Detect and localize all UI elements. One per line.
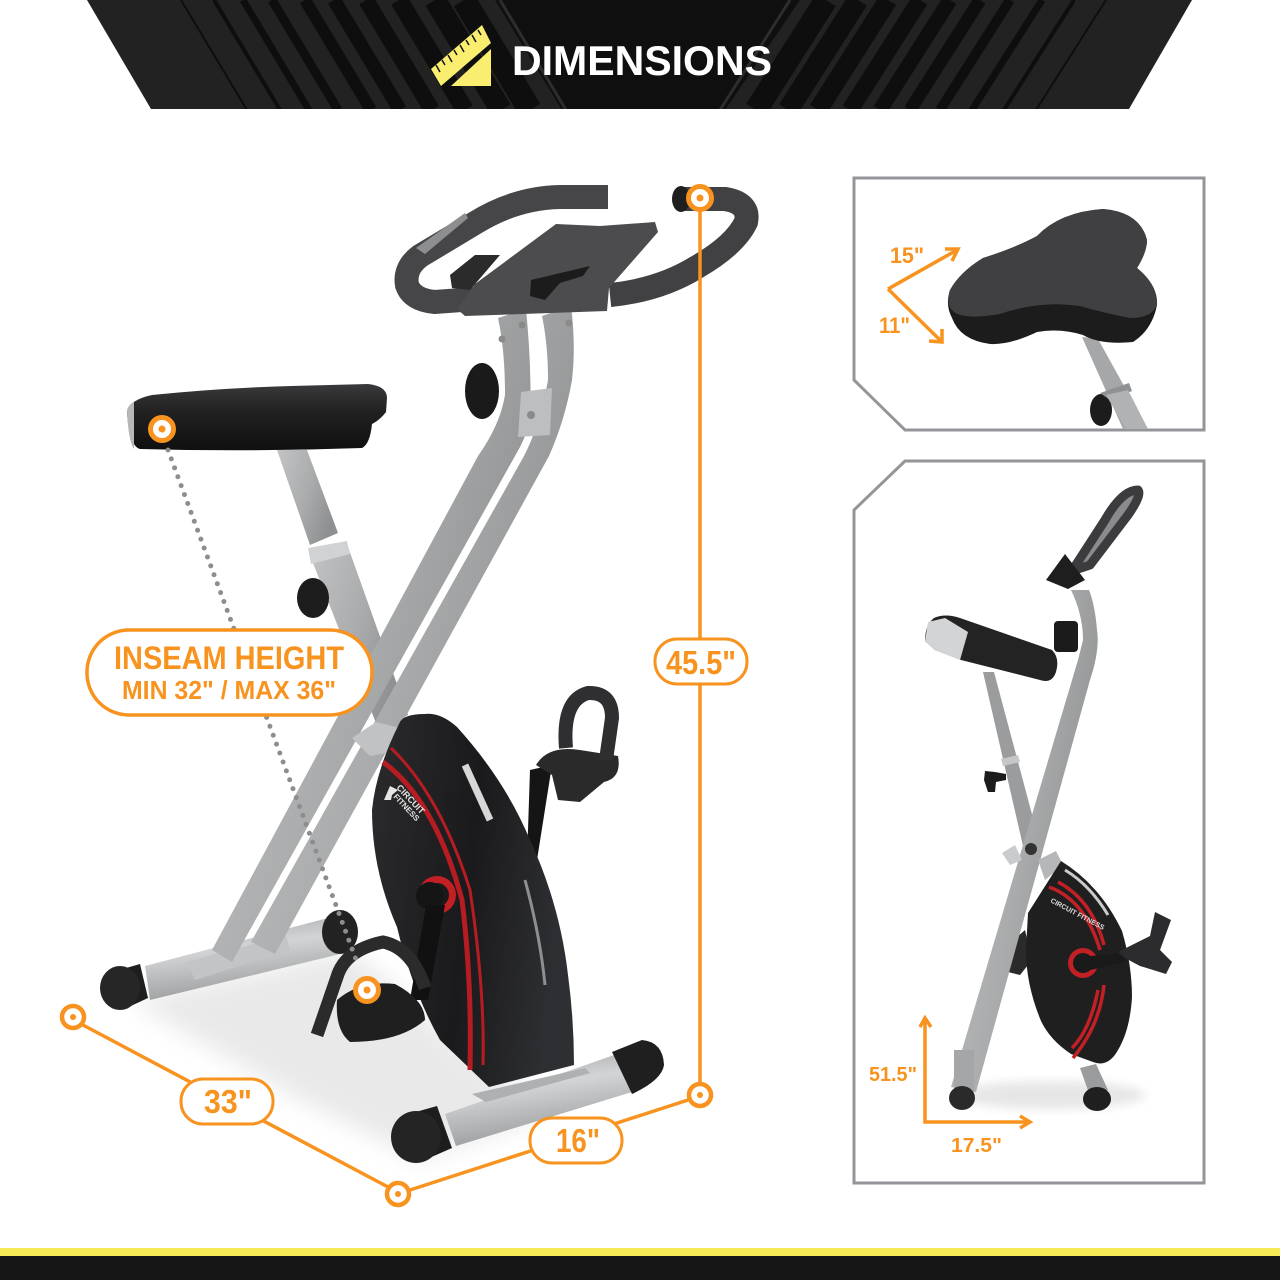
header banner bbox=[87, 0, 1192, 110]
height dimension line bbox=[698, 210, 702, 1082]
arrows bbox=[920, 1018, 1030, 1128]
marker: handlebar top bbox=[688, 186, 712, 210]
rear foot tube bbox=[145, 918, 340, 1000]
seat knob bbox=[297, 578, 329, 618]
marker: front corner bbox=[387, 1183, 409, 1205]
handlebar left bbox=[407, 197, 608, 302]
seat top surface bbox=[948, 209, 1157, 318]
red stripes bbox=[383, 748, 483, 1070]
handlebar mount bbox=[1046, 554, 1085, 589]
side highlights bbox=[1065, 870, 1108, 915]
post collar bbox=[1001, 755, 1020, 766]
second frame tube bbox=[251, 306, 574, 954]
upright knob bbox=[465, 363, 499, 419]
main frame tube bbox=[212, 309, 530, 962]
panel: side view bbox=[854, 461, 1204, 1183]
front foot bbox=[1080, 1064, 1111, 1111]
near pedal bbox=[317, 942, 425, 1042]
callout: inseam height: INSEAM HEIGHT bbox=[114, 640, 344, 676]
console left mount bbox=[450, 255, 500, 290]
label: width 16 bbox=[530, 1118, 622, 1163]
side view seat bbox=[925, 616, 1057, 681]
main bike illustration bbox=[100, 186, 747, 1163]
marker: seat bbox=[150, 418, 174, 440]
handlebar grip pad bbox=[416, 213, 468, 254]
case base plate bbox=[472, 1068, 590, 1102]
seat knob detail bbox=[1090, 394, 1112, 426]
main tube side bbox=[951, 590, 1098, 1092]
case highlight bbox=[525, 880, 545, 985]
rear tube bracket bbox=[187, 935, 290, 980]
pivot bracket bbox=[352, 722, 400, 756]
front right cap bbox=[612, 1040, 664, 1094]
side logo: CIRCUIT FITNESS bbox=[1049, 898, 1106, 932]
console bracket bbox=[530, 266, 590, 300]
label: length 33: 33" bbox=[204, 1083, 252, 1120]
post knob bbox=[984, 771, 1006, 792]
floor shadow bbox=[130, 950, 560, 1160]
side pedal bbox=[1118, 912, 1172, 974]
seat top view bbox=[948, 209, 1157, 344]
far pedal bbox=[527, 693, 619, 860]
marker: rear left bbox=[62, 1006, 84, 1028]
logo: FITNESS bbox=[392, 792, 422, 824]
rear left cap bbox=[100, 964, 148, 1010]
hub bbox=[416, 876, 456, 914]
arrow 15 bbox=[888, 249, 958, 289]
label: length 33 bbox=[181, 1079, 273, 1124]
text 11: 11" bbox=[879, 313, 910, 338]
arrow 11 bbox=[888, 289, 942, 342]
title: DIMENSIONS bbox=[512, 37, 772, 84]
handlebar end bbox=[672, 186, 690, 212]
marker: floor right bbox=[689, 1084, 711, 1106]
far pedal bbox=[1008, 930, 1032, 975]
console bbox=[457, 222, 658, 316]
front foot tube bbox=[445, 1053, 632, 1146]
case highlight top bbox=[465, 765, 490, 820]
seat post detail bbox=[1082, 337, 1148, 429]
upright knob bbox=[1054, 621, 1078, 652]
seat post collar bbox=[1100, 383, 1132, 400]
width dimension line bbox=[410, 1100, 688, 1190]
logo bbox=[384, 783, 427, 824]
pivot bbox=[1002, 843, 1063, 880]
icon: ruler and set square bbox=[431, 25, 491, 86]
text 17.5: 17.5" bbox=[951, 1135, 1002, 1157]
text 51.5: 51.5" bbox=[869, 1064, 917, 1086]
logo: CIRCUIT bbox=[395, 783, 427, 816]
handlebar side bbox=[1072, 490, 1139, 571]
inseam dotted line bbox=[168, 450, 358, 965]
length dimension line bbox=[81, 1024, 388, 1187]
front left cap bbox=[391, 1106, 452, 1163]
label: height 45.5: 45.5" bbox=[666, 644, 736, 681]
panel: seat detail bbox=[854, 178, 1204, 430]
post front bbox=[1106, 390, 1148, 429]
side case bbox=[1026, 861, 1132, 1064]
side post bbox=[983, 672, 1033, 846]
main seat bbox=[127, 384, 387, 450]
side stripes bbox=[1049, 882, 1104, 1058]
text 15: 15" bbox=[890, 243, 924, 268]
handlebar right bbox=[610, 199, 747, 295]
marker: pedal bbox=[356, 978, 378, 1002]
shadow bbox=[955, 1081, 1145, 1109]
side hub bbox=[1068, 948, 1125, 978]
rear foot bbox=[949, 1050, 975, 1110]
callout: inseam height bbox=[87, 630, 372, 715]
flywheel case bbox=[372, 714, 574, 1087]
crank arm bbox=[410, 905, 445, 1000]
frame plate bbox=[518, 388, 552, 437]
callout: inseam height: MIN 32" / MAX 36" bbox=[122, 675, 336, 705]
label: width 16: 16" bbox=[556, 1122, 600, 1159]
footer bar bbox=[0, 1248, 1280, 1280]
rear right cap bbox=[322, 910, 358, 954]
seat post bbox=[277, 450, 408, 728]
plate bolts bbox=[498, 320, 572, 419]
